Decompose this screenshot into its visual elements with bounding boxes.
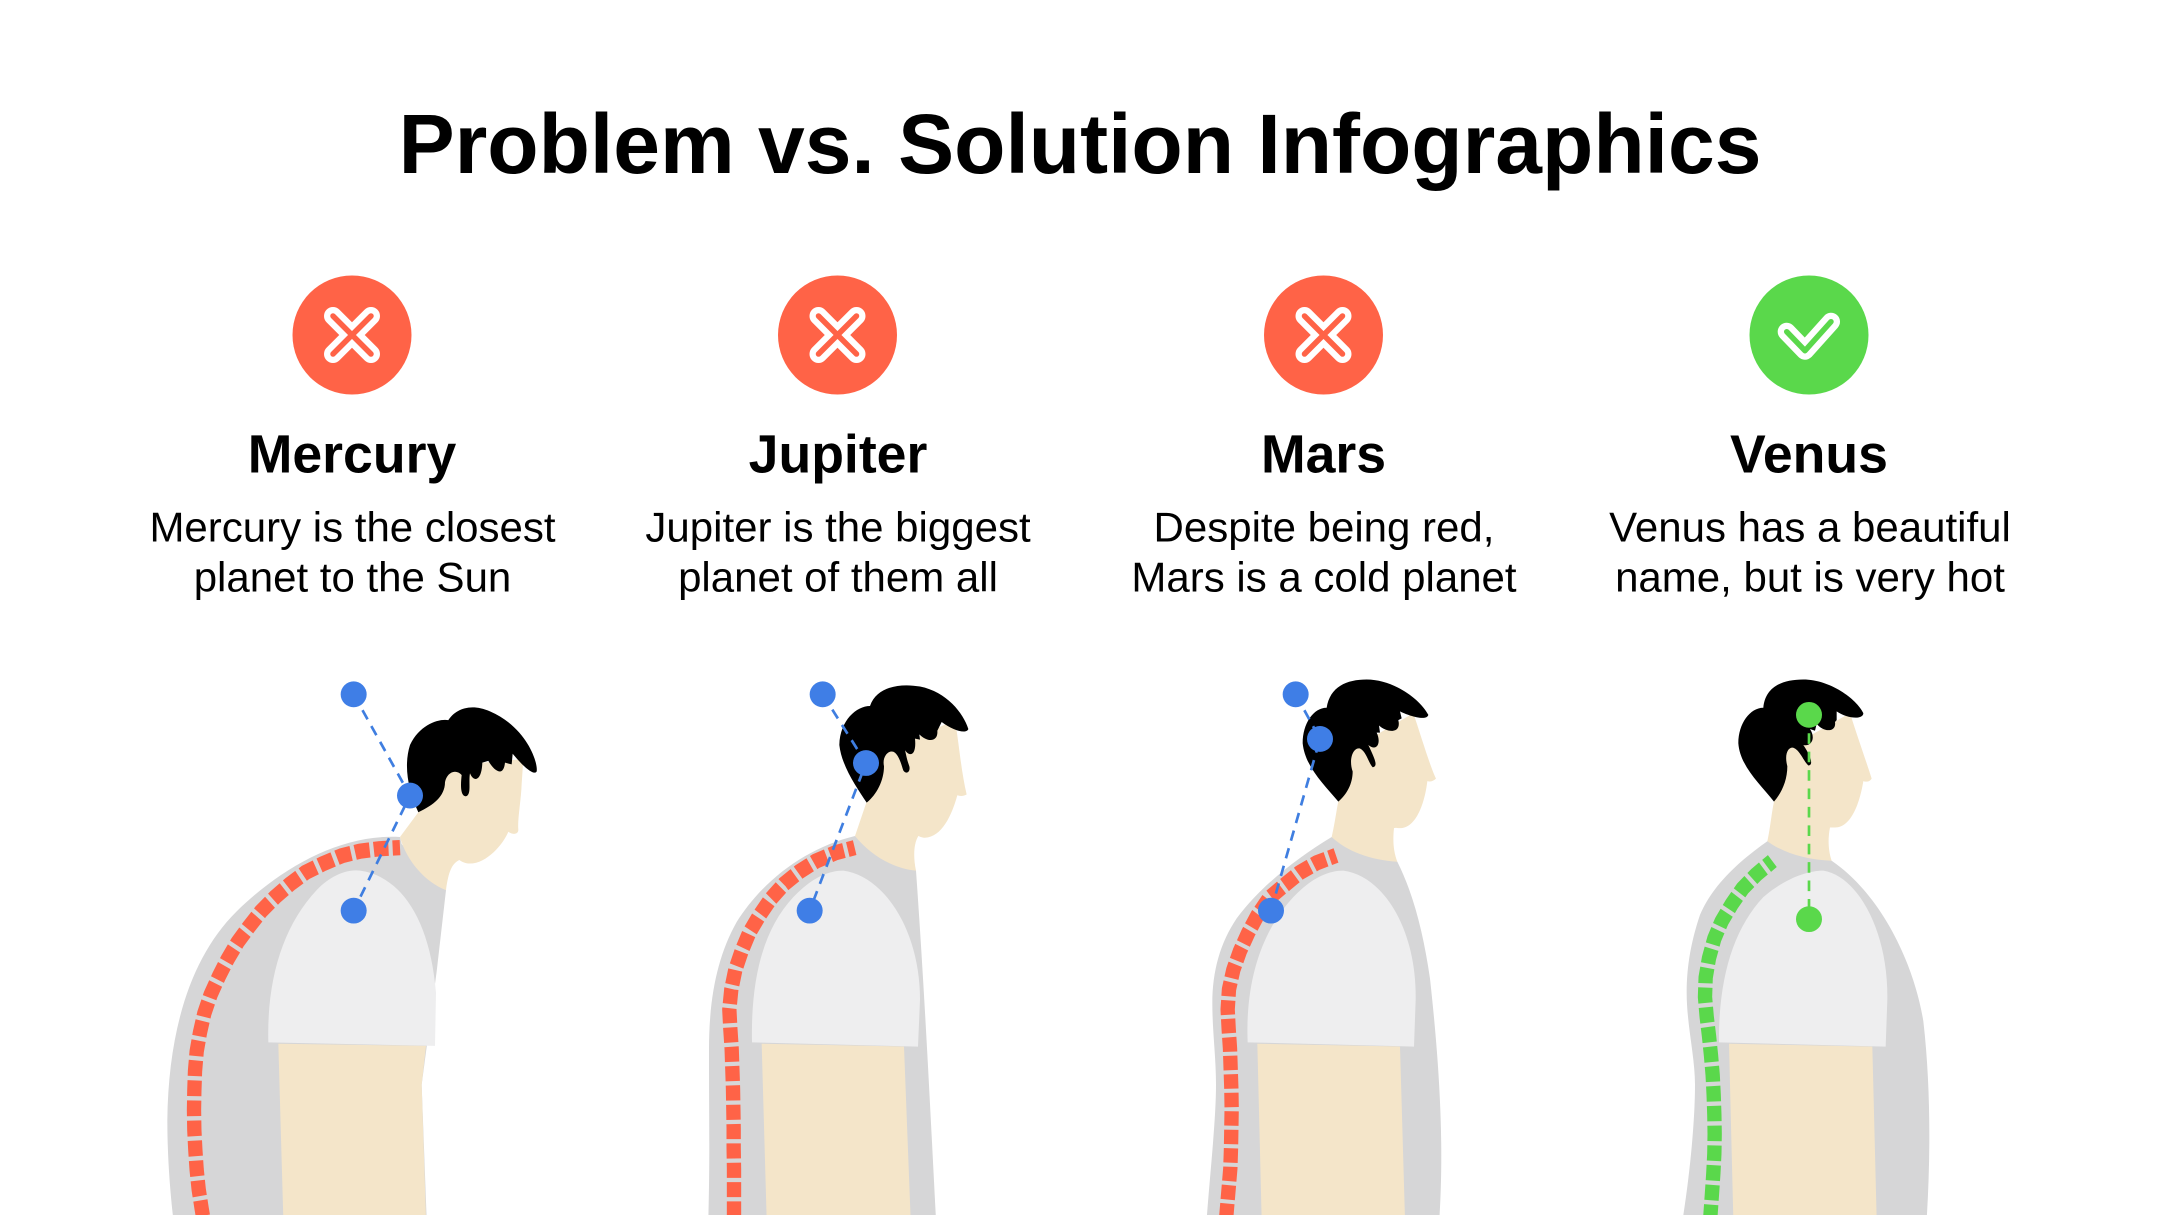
- head and neck: [1767, 713, 1872, 861]
- sleeve: [1719, 871, 1887, 1047]
- icon: red cross: [1264, 276, 1383, 394]
- torso: [1257, 1044, 1405, 1215]
- panel: Venus: [1609, 276, 2011, 1215]
- sleeve: [268, 870, 436, 1046]
- text: Jupiter description: Jupiter is the biggest: [645, 504, 1031, 550]
- body silhouette: [167, 837, 446, 1215]
- hair: [407, 707, 537, 812]
- spine: [194, 848, 400, 1215]
- icon: red cross: [778, 276, 897, 394]
- panel: Mercury: [149, 276, 556, 1215]
- figure: mild slouched posture: [1207, 679, 1441, 1215]
- body silhouette: [1683, 841, 1929, 1215]
- text: Mars description: Mars is a cold planet: [1131, 554, 1517, 600]
- heading: Mars: Mars: [1261, 424, 1386, 484]
- posture line: [341, 681, 423, 924]
- spine: [1705, 861, 1772, 1215]
- panel: Jupiter: [645, 276, 1031, 1215]
- icon: red cross: [292, 276, 412, 394]
- body silhouette: [1207, 837, 1441, 1215]
- heading: Jupiter: Jupiter: [749, 424, 927, 484]
- hair: [1738, 679, 1863, 802]
- text: Venus description: Venus has a beautiful: [1609, 504, 2011, 550]
- torso: [1729, 1044, 1877, 1215]
- text: Mercury description: Mercury is the closest: [149, 504, 556, 550]
- head and neck: [855, 724, 967, 871]
- posture line: [1796, 702, 1822, 932]
- figure: correct posture: [1683, 679, 1929, 1215]
- head and neck: [1332, 713, 1436, 862]
- torso: [762, 1044, 911, 1215]
- icon: green check: [1750, 276, 1868, 394]
- title: Problem vs. Solution Infographics: [399, 97, 1761, 191]
- spine: [729, 848, 855, 1215]
- text: Jupiter description: planet of them all: [678, 554, 998, 600]
- sleeve: [1247, 871, 1416, 1047]
- figure: severe slouched posture: [167, 681, 537, 1215]
- torso: [278, 1044, 426, 1215]
- posture line: [1258, 681, 1333, 924]
- posture line: [797, 681, 879, 924]
- body silhouette: [708, 836, 936, 1215]
- heading: Venus: Venus: [1730, 424, 1888, 484]
- sleeve: [752, 871, 920, 1047]
- text: Mars description: Despite being red,: [1154, 504, 1494, 550]
- text: Venus description: name, but is very hot: [1615, 554, 2005, 600]
- hair: [1303, 679, 1428, 802]
- panel: Mars: [1131, 276, 1517, 1215]
- heading: Mercury: Mercury: [248, 424, 456, 484]
- text: Mercury description: planet to the Sun: [194, 554, 511, 600]
- hair: [839, 685, 968, 803]
- figure: moderate slouched posture: [708, 681, 968, 1215]
- head and neck: [400, 759, 523, 890]
- spine: [1224, 855, 1336, 1215]
